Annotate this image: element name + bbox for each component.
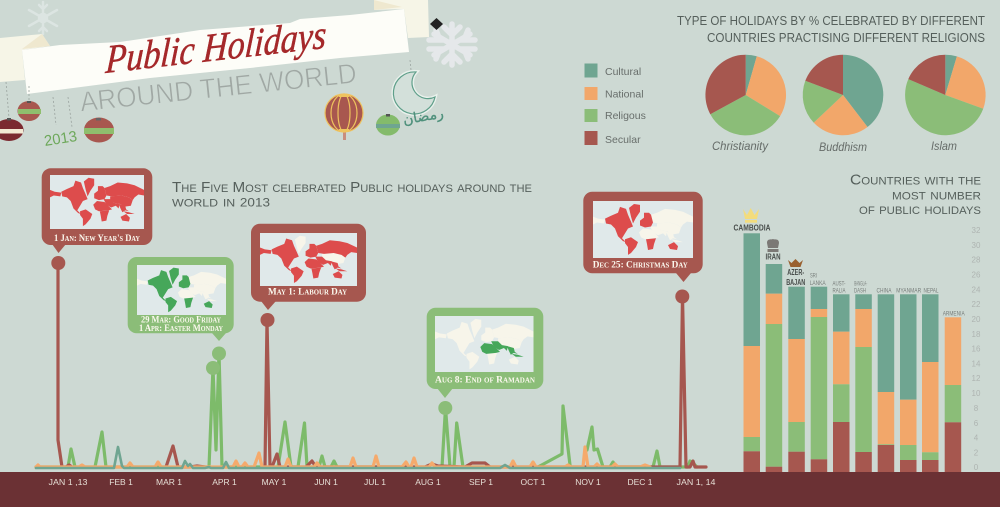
heading: five most celebrated: world in 2013 [172,194,270,210]
y axis labels: 2 [974,448,979,458]
icon: crescent moon [393,72,435,114]
country labels: CHINA [876,288,892,294]
footer band [0,472,1000,507]
heading: type of holidays [677,14,985,45]
callout: new year's day [42,168,152,253]
x axis month labels: JUL 1 [364,477,386,487]
series: cultural [36,447,680,468]
bar: Sri Lanka [811,287,827,472]
y axis labels: 24 [972,286,981,294]
callout: end of ramadan: Aug 8: End of Ramadan [435,376,535,386]
y axis labels: 22 [972,300,981,309]
x axis month labels: FEB 1 [109,477,133,487]
pie: Christianity: Christianity [712,139,769,153]
country labels: ARMENIA [943,312,965,318]
pin: new year [51,256,65,270]
y axis labels [972,226,981,472]
series: religious [36,353,697,467]
y axis labels: 20 [972,315,981,324]
country labels: AUST- [832,282,846,288]
y axis labels: 0 [974,463,979,472]
bar: Bangladesh [855,294,872,472]
ornament: small bauble [18,101,41,121]
y axis labels: 8 [974,404,979,413]
country labels [734,224,965,318]
icon: black diamond [430,18,443,30]
line chart: holidays through the year [36,263,706,468]
y axis labels: 26 [972,270,981,280]
country labels: IRAN [766,252,781,262]
callout: labour day [251,224,366,310]
icon: bronze crown [788,259,803,267]
bar: Myanmar [900,294,916,472]
x axis month labels: JAN 1 ,13 [48,477,88,487]
icon: large snowflake [429,24,475,65]
ornament: green bauble [376,114,400,136]
pin: labour day [260,313,274,327]
icon: silver crown [767,239,779,252]
x axis month labels: DEC 1 [627,477,653,487]
pin: christmas [675,290,689,304]
country labels: DASH [854,288,866,294]
bar: Azerbaijan [788,287,805,472]
x axis month labels: MAR 1 [156,477,182,487]
bar: Cambodia [744,233,760,472]
bar: China [878,294,894,472]
x axis month labels [48,477,716,487]
label: 2013: 2013 [43,128,78,150]
subtitle: around the world: AROUND THE WORLD [78,58,358,117]
y axis labels: 28 [972,256,981,264]
pie: Christianity [705,55,786,153]
ornament: dark bauble [0,118,24,141]
callout: good friday and easter monday: 1 Apr: Easter Monday [139,324,223,334]
x axis month labels: JUN 1 [314,477,338,487]
y axis labels: 32 [972,226,981,235]
bar: Armenia [945,317,961,472]
x axis month labels: JAN 1, 14 [676,477,716,487]
ornament: lantern [325,94,363,140]
heading: type of holidays: COUNTRIES PRACTISING DIFFERENT RELIGIONS [707,31,985,45]
country labels: RALIA [832,288,846,294]
country labels: NEPAL [924,288,939,294]
callout: good friday and easter monday: 29 Mar: Good Friday [141,316,221,326]
x axis month labels: SEP 1 [469,477,493,487]
x axis month labels: NOV 1 [575,477,601,487]
callout: christmas day [583,192,703,282]
label: arabic ramadan: رمضان [402,106,445,128]
ornament: large bauble [84,118,114,142]
heading: countries with most holidays: most number [892,186,981,204]
legend [584,64,646,146]
y axis labels: 10 [972,389,981,398]
y axis labels: 14 [972,360,981,368]
country labels: SRI [810,274,817,280]
y axis labels: 16 [972,344,981,354]
legend: Cultural [605,66,641,78]
heading: countries with most holidays [850,172,981,218]
legend: National [605,88,644,100]
country labels: MYANMAR [896,288,922,294]
heading: countries with most holidays: Countries with the [850,172,981,188]
heading: five most celebrated: The Five Most celebrated Public holidays around the [172,179,532,196]
title: Public Holidays [104,12,328,82]
y axis labels: 12 [972,374,981,383]
x axis month labels: APR 1 [212,477,237,487]
y axis labels: 6 [974,419,979,428]
legend: Religous [605,110,646,122]
country labels: BAJAN [786,278,805,287]
x axis month labels: OCT 1 [521,477,546,487]
series: national [36,447,650,467]
x axis month labels: AUG 1 [415,477,441,487]
callout: good friday and easter monday [128,257,234,341]
y axis labels: 18 [972,330,981,339]
pin: end of ramadan [438,401,452,415]
pie: Buddhism [803,55,883,154]
pie: Islam [905,55,986,153]
country labels: AZER- [787,268,804,277]
y axis labels: 4 [974,434,979,442]
callout: labour day: May 1: Labour Day [268,288,347,298]
pin: good friday [206,361,220,375]
x axis month labels: MAY 1 [262,477,287,487]
country labels: BANGLA- [854,282,867,288]
callout: end of ramadan [427,308,543,398]
legend: Secular [605,134,641,146]
stacked bar chart: countries [744,233,961,472]
pin: easter monday [212,346,226,360]
series: secular [58,263,706,467]
heading: countries with most holidays: of public holidays [859,201,981,218]
strings for ornaments [6,60,411,127]
y axis labels: 30 [972,241,981,250]
country labels: LANKA [810,281,826,287]
country labels: CAMBODIA [734,224,771,232]
pie: Buddhism: Buddhism [819,140,867,154]
icon: gold crown [743,208,759,223]
callout: christmas day: Dec 25: Christmas Day [593,260,688,270]
heading: five most celebrated [172,179,532,210]
pie: Islam: Islam [931,139,957,153]
bar: Nepal [922,294,938,472]
bar: Iran [766,264,782,472]
icon: small snowflake [29,2,57,34]
bar: Australia [833,294,850,472]
title ribbon [0,0,429,94]
callout: new year's day: 1 Jan: New Year's Day [54,234,140,244]
